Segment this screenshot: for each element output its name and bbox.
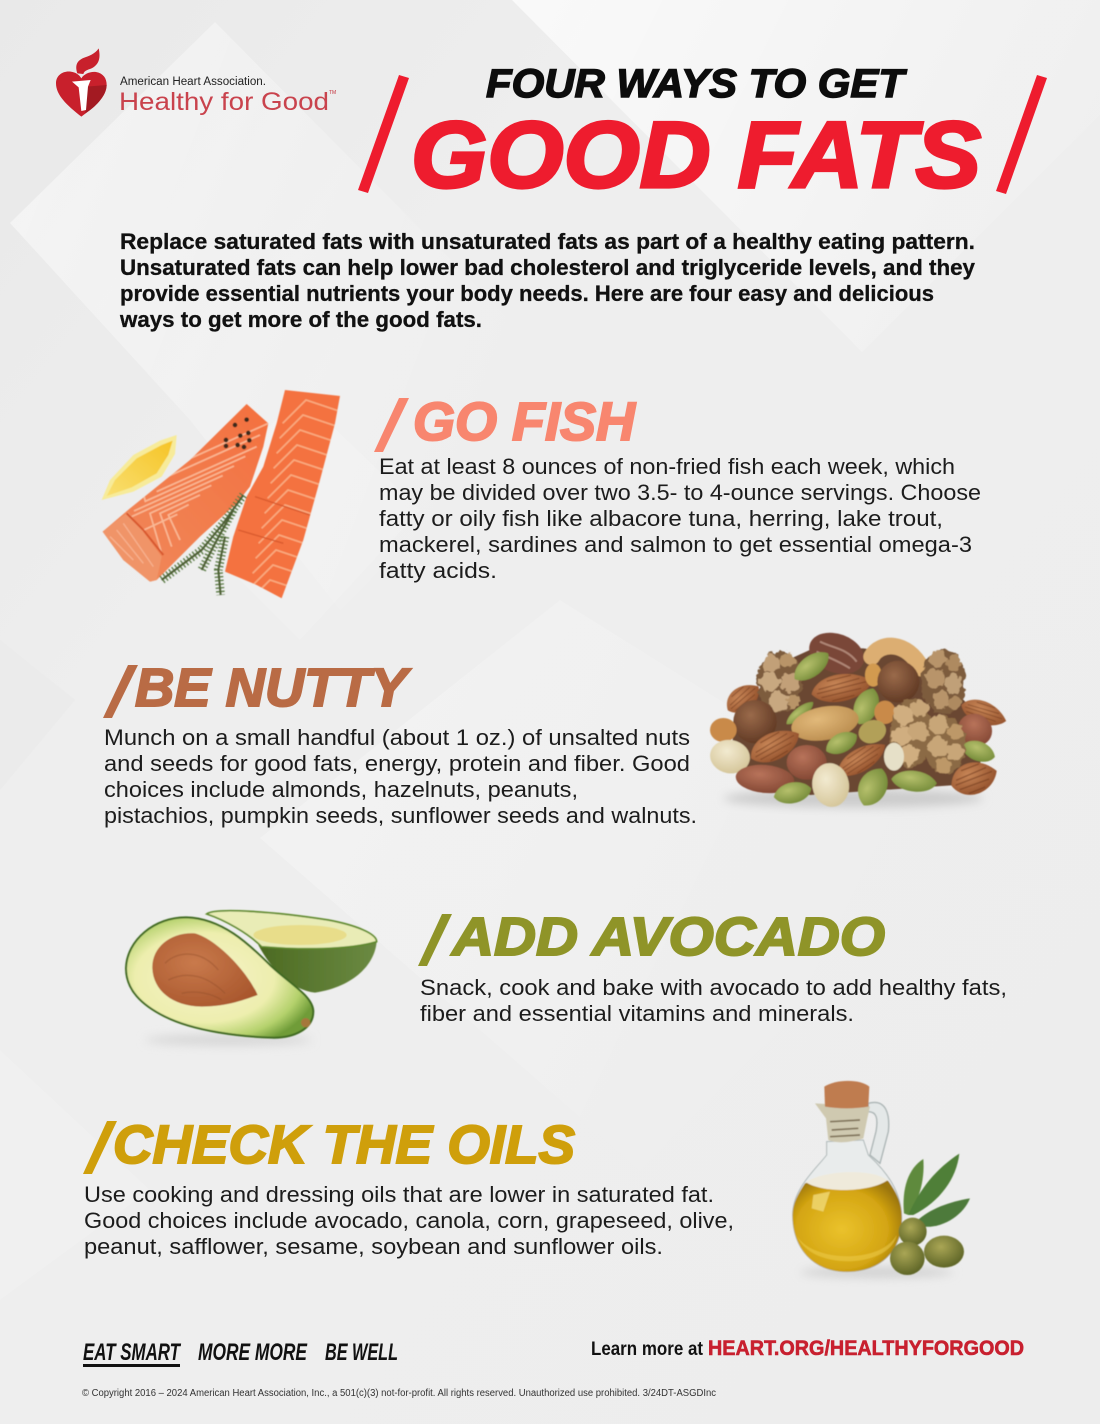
panel: add avocado xyxy=(126,907,1007,1045)
title line: four ways to get: FOUR WAYS TO GET xyxy=(486,62,908,106)
logo wordmark xyxy=(119,76,336,116)
heading slash: add avocado xyxy=(418,914,452,966)
intro paragraph: Replace saturated fats with unsaturated fats as part of a healthy eating pattern. xyxy=(120,229,975,254)
body: go fish: fatty acids. xyxy=(379,558,497,583)
image: pile of mixed nuts xyxy=(707,625,1010,812)
body: go fish: may be divided over two 3.5- to 4-ounce servings. Choose xyxy=(379,480,981,505)
panel: be nutty xyxy=(103,625,1010,828)
intro paragraph: provide essential nutrients your body needs. Here are four easy and delicious xyxy=(120,281,934,306)
icon: heart and torch xyxy=(56,48,107,117)
tagline: eat smart, move more, be well: BE WELL xyxy=(325,1339,398,1366)
heading slash: go fish xyxy=(374,398,409,452)
footer xyxy=(82,1337,1024,1399)
heading: add avocado: ADD AVOCADO xyxy=(450,907,885,967)
body: check the oils: Use cooking and dressing oils that are lower in saturated fat. xyxy=(84,1182,714,1207)
heading slash: be nutty xyxy=(103,665,138,718)
copyright: © Copyright 2016 – 2024 American Heart Association, Inc., a 501(c)(3) not-for-profit. All rights reserved. Unauthorized use prohibited. 3/24DT-ASGDInc xyxy=(82,1388,716,1399)
image: halved avocado with pit xyxy=(126,911,377,1045)
body: go fish xyxy=(379,454,981,583)
intro paragraph: Unsaturated fats can help lower bad cholesterol and triglyceride levels, and they xyxy=(120,255,976,280)
heading: go fish: GO FISH xyxy=(413,392,636,452)
body: be nutty: pistachios, pumpkin seeds, sunflower seeds and walnuts. xyxy=(104,803,697,828)
intro paragraph xyxy=(119,229,976,332)
logo wordmark: Healthy for Good xyxy=(119,88,329,116)
learn more link: Learn more at xyxy=(591,1339,704,1360)
intro paragraph: ways to get more of the good fats. xyxy=(119,307,482,332)
body: go fish: mackerel, sardines and salmon to get essential omega-3 xyxy=(379,532,972,557)
body: check the oils: peanut, safflower, sesame, soybean and sunflower oils. xyxy=(84,1234,663,1259)
body: go fish: Eat at least 8 ounces of non-fried fish each week, which xyxy=(379,454,955,479)
heading: check the oils: CHECK THE OILS xyxy=(113,1115,575,1175)
logo wordmark: TM xyxy=(329,90,336,96)
body: check the oils: Good choices include avocado, canola, corn, grapeseed, olive, xyxy=(84,1208,734,1233)
logo wordmark: American Heart Association. xyxy=(120,76,266,88)
body: be nutty: Munch on a small handful (about 1 oz.) of unsalted nuts xyxy=(104,725,690,750)
title slash left xyxy=(358,75,409,193)
body: add avocado: Snack, cook and bake with avocado to add healthy fats, xyxy=(420,975,1007,1000)
panel: go fish xyxy=(102,390,981,603)
panel: check the oils xyxy=(83,1081,970,1278)
learn more link xyxy=(591,1337,1024,1360)
body: check the oils xyxy=(84,1182,734,1259)
tagline: eat smart, move more, be well: MORE MORE xyxy=(198,1339,308,1366)
body: add avocado xyxy=(420,975,1007,1026)
title xyxy=(358,62,1047,207)
image: salmon fillets with lemon and rosemary xyxy=(102,390,346,603)
tagline: eat smart, move more, be well: EAT SMART xyxy=(83,1339,182,1366)
learn more link: HEART.ORG/HEALTHYFORGOOD xyxy=(708,1337,1024,1360)
body: add avocado: fiber and essential vitamins and minerals. xyxy=(420,1001,854,1026)
logo: American Heart Association Healthy for Good xyxy=(56,48,336,117)
body: be nutty xyxy=(104,725,697,828)
body: go fish: fatty or oily fish like albacore tuna, herring, lake trout, xyxy=(379,506,943,531)
title slash right xyxy=(996,75,1047,194)
heading: be nutty: BE NUTTY xyxy=(135,658,412,718)
tagline: eat smart, move more, be well xyxy=(83,1339,398,1367)
body: be nutty: and seeds for good fats, energy, protein and fiber. Good xyxy=(104,751,690,776)
image: glass bottle of olive oil with olives xyxy=(793,1081,970,1278)
title line: good fats: GOOD FATS xyxy=(411,102,981,207)
body: be nutty: choices include almonds, hazelnuts, peanuts, xyxy=(104,777,578,802)
heading slash: check the oils xyxy=(83,1121,117,1174)
